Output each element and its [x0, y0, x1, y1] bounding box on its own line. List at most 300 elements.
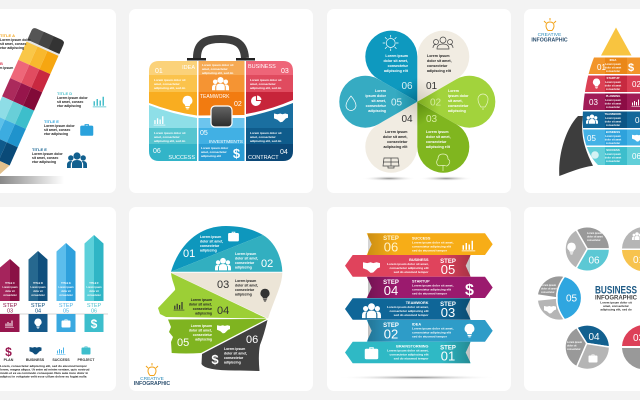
arrow step 03: TITLE C [5, 281, 15, 285]
head segment 03: Lorem ipsum [235, 279, 256, 283]
petal texts: consectetur [426, 140, 447, 144]
arrow step 06: dolor sit [89, 290, 99, 293]
head segment 04 [158, 273, 267, 318]
head segment 05: consectetur [193, 333, 213, 337]
arrow step 05: consectetur [59, 294, 73, 297]
segment: idea: amet, consectetur [154, 82, 181, 86]
segment: contract: adipiscing elit, sed do [250, 139, 282, 143]
head segment 04: 04 [217, 305, 229, 317]
ribbon step 01: sed do eiusmod tempor [394, 356, 429, 360]
segment: success: Lorem ipsum dolor sit [154, 131, 186, 135]
legend: success [52, 348, 70, 362]
circle 05: dolor sit amet [541, 288, 557, 290]
arrow step 06 [84, 235, 104, 332]
arrow step 04: STEP [31, 303, 46, 309]
center title: INFOGRAPHIC [595, 296, 638, 302]
petal numbers: 05 [391, 98, 403, 108]
ribbon step 05: STEP [440, 259, 456, 265]
arrow step 06: STEP [87, 303, 102, 309]
circle 04: dolor sit [567, 344, 577, 348]
panel: briefcase infographic [129, 9, 313, 193]
arrow step 03: 03 [7, 308, 13, 314]
ribbon step 06 [367, 233, 493, 255]
legend: business: BUSINESS [26, 358, 45, 362]
title D: sit amet, consec [57, 100, 83, 104]
circle 05: consectetur [541, 291, 555, 294]
arrow step 05: TITLE E [61, 281, 71, 285]
rocket tier 06 [586, 147, 640, 165]
segment: investments: $ [233, 146, 241, 161]
segment: investments: amet, consectetur [201, 150, 228, 154]
segment: teamwork: Lorem ipsum dolor sit [202, 63, 234, 67]
ribbon step 05: Lorem ipsum dolor sit amet, [387, 262, 429, 266]
rocket tier 05: consectetur [606, 142, 620, 145]
ribbon step 05: BUSINESS [409, 258, 429, 262]
rocket tier 03: Lorem ipsum [605, 99, 622, 102]
head segment 06 [202, 320, 268, 371]
ribbon step 04: 04 [384, 283, 398, 298]
arrow step 05: dolor sit [61, 290, 71, 293]
ribbon step 02: 02 [384, 326, 398, 342]
head segment 04: Lorem ipsum [191, 298, 212, 302]
circle 05: 05 [566, 294, 577, 304]
ribbon step 05 [345, 255, 471, 277]
circle 04: 04 [588, 332, 600, 343]
panel: rocket infographic [524, 9, 640, 193]
ribbon step 05: sed do eiusmod tempor [394, 270, 429, 274]
rocket tier 03: consectetur [606, 106, 620, 109]
rocket tier 05: dolor sit amet [605, 138, 621, 142]
legend: business [26, 347, 45, 362]
petal texts: Lorem ipsum [385, 130, 408, 134]
title F: Lorem ipsum dolor [32, 152, 63, 156]
ribbon step 06: STEP [383, 236, 399, 242]
icon: chart [93, 97, 106, 107]
panel: head infographic [129, 207, 313, 391]
icon: sun [383, 35, 398, 51]
segment: business: adipiscing elit, sed do [250, 86, 282, 90]
petal numbers: 03 [426, 114, 438, 125]
head segment 04: dolor sit amet, [189, 302, 212, 306]
ribbon step 06: sed do eiusmod tempor [412, 248, 448, 252]
circle 04 [565, 325, 610, 369]
title B: B [0, 61, 3, 66]
rocket tier 04: dolor sit amet [605, 120, 621, 124]
ribbon step 02: Lorem ipsum dolor sit amet, [412, 326, 454, 330]
rocket tier 06: consectetur [606, 160, 620, 163]
title D: etur adipiscing [57, 104, 81, 108]
arrow step 04: TITLE D [33, 281, 43, 285]
petal texts: dolor sit amet, [426, 135, 451, 139]
segment: investments: Lorem ipsum dolor [201, 146, 229, 150]
arrow step 05: 05 [63, 308, 69, 314]
petal texts: consectetur [366, 104, 387, 108]
ribbon step 06: Lorem ipsum dolor sit amet, [412, 240, 454, 244]
head segment 01: dolor sit amet, [200, 240, 223, 244]
ribbon step 04: STEP [383, 280, 399, 286]
icon: people [67, 152, 87, 168]
head segment 06: dolor sit amet, [224, 352, 247, 356]
segment: contract: amet, consectetur [250, 135, 277, 139]
legend: success: SUCCESS [52, 358, 70, 362]
petal 03 [395, 89, 479, 182]
rocket tier 03: 03 [589, 98, 598, 107]
panel: ribbon steps infographic [327, 207, 511, 391]
title D: Lorem ipsum dolor [57, 96, 88, 100]
title B [0, 61, 13, 70]
petal 05 [339, 76, 417, 128]
ribbon step 03: STEP [440, 302, 456, 308]
panel: circles infographic [524, 207, 640, 391]
petal texts: Lorem [448, 89, 459, 93]
petal texts: Lorem ipsum [385, 54, 408, 58]
petal texts: consectetur [448, 104, 469, 108]
logo: creative infographic: INFOGRAPHIC [134, 381, 170, 387]
legend: plan: PLAN [4, 358, 14, 362]
segment: teamwork: amet, consectetur [202, 67, 229, 71]
head segment 03: consectetur [235, 288, 255, 292]
head segment 06: adipiscing [224, 360, 241, 364]
ribbon step 04: consectetur adipiscing elit [412, 288, 451, 292]
petal texts: consectetur [427, 64, 448, 68]
logo: creative infographic [531, 18, 568, 44]
head segment 05: 05 [177, 337, 189, 349]
paragraph: Lorem, consectetur adipiscing elit, sed do eiusmod tempor [0, 364, 88, 368]
rocket tier 02: STARTUP [606, 76, 620, 80]
rocket tier 04: TEAMWORK [605, 112, 621, 116]
arrow step 03: STEP [3, 303, 18, 309]
head segment 04: adipiscing [195, 312, 212, 316]
paragraph: lorem, magna aliqua. Ut enim ad minim veniam, quis nostrud [0, 368, 90, 372]
ribbon step 03: Lorem ipsum dolor sit amet, [387, 305, 429, 309]
rocket tier 05: BUSINESS [606, 130, 620, 134]
petal texts: consectetur [388, 64, 409, 68]
center title: amet, consectetur [603, 304, 630, 308]
head segment 03: adipiscing [235, 292, 252, 296]
arrow step 06: 06 [91, 308, 97, 314]
head segment 02: 02 [261, 258, 273, 270]
arrow step 04: consectetur [31, 294, 45, 297]
ribbon step 01: BRAINSTORMING [396, 344, 429, 348]
circle 06: consectetur [587, 239, 601, 242]
ribbon step 01: Lorem ipsum dolor sit amet, [387, 348, 429, 352]
segment: teamwork: 02 [234, 101, 242, 108]
head segment 01 [171, 226, 263, 272]
legend: plan [4, 345, 14, 362]
ribbon step 01: STEP [440, 346, 456, 352]
petal texts: adipiscing [368, 109, 386, 113]
segment: business: 03 [281, 68, 289, 75]
head segment 06: Lorem ipsum [224, 347, 245, 351]
arrow step 06: Lorem ipsum [86, 286, 102, 289]
petal texts: consectetur [387, 140, 408, 144]
head segment 01: adipiscing [200, 248, 217, 252]
center title: Lorem ipsum dolor sit [600, 300, 632, 304]
circle 03 [622, 325, 640, 369]
rocket tier 01: dolor sit amet [605, 66, 621, 70]
circle 06 [565, 227, 610, 271]
ribbon step 02 [367, 320, 493, 342]
title F: TITLE E [32, 147, 47, 152]
petal numbers: 06 [402, 81, 413, 92]
rocket tier 02: dolor sit amet [605, 84, 621, 88]
arrow step 05: Lorem ipsum [58, 286, 74, 289]
segment: teamwork: adipiscing elit, sed do [202, 71, 234, 75]
petal texts: sit amet, [371, 99, 386, 103]
segment: idea: 01 [155, 68, 163, 75]
circle 06: dolor sit amet [587, 236, 603, 238]
segment: idea: IDEA [182, 65, 195, 71]
rocket tier 02 [580, 76, 640, 92]
rocket tier 05 [580, 130, 640, 146]
rocket tier 06: Lorem ipsum [605, 153, 622, 156]
arrow step 03 [0, 259, 20, 332]
rocket fin [559, 116, 593, 176]
segment: business [246, 61, 293, 114]
arrow step 06: $ [91, 317, 98, 331]
rocket tier 01: $ [628, 62, 634, 74]
circle 04: Lorem ipsum [567, 341, 582, 344]
panel: pencil infographic [0, 9, 116, 202]
icon: water drop [346, 96, 356, 110]
rocket nose [601, 28, 632, 56]
title A: sit amet, consec [0, 42, 26, 46]
shelf line [0, 313, 108, 315]
panel: flower infographic [327, 9, 511, 193]
arrow step 05: STEP [59, 303, 74, 309]
rocket tier 01: 01 [597, 63, 606, 72]
ribbon step 03 [345, 298, 471, 320]
rocket tier 01: Lorem ipsum [605, 63, 622, 66]
petal texts: Lorem ipsum [426, 130, 449, 134]
petal 02 [417, 76, 495, 128]
ribbon step 02: IDEA [412, 322, 421, 326]
segment: idea: Lorem ipsum dolor sit [154, 78, 186, 82]
petal texts: adipiscing elit [384, 145, 408, 149]
ribbon step 01 [345, 342, 471, 364]
segment: contract: Lorem ipsum dolor sit [250, 131, 282, 135]
icon: people outline [433, 37, 453, 49]
pencil [0, 27, 65, 202]
pencil shadow [0, 176, 64, 184]
center title: adipiscing elit, sed do [600, 308, 632, 312]
paragraph: adipisci in voluptate velit esse cillum dolore eu fugiat nulla [0, 374, 87, 378]
segment: investments: 05 [200, 130, 208, 137]
ribbon step 04: $ [465, 282, 474, 299]
segment: teamwork: TEAMWORK [200, 94, 230, 100]
title E: sit amet, consec [44, 128, 70, 132]
rocket tier 01: consectetur [606, 70, 620, 73]
ribbon step 04: Lorem ipsum dolor sit amet, [412, 284, 454, 288]
segment: success: SUCCESS [168, 155, 195, 161]
arrow step 03: Lorem ipsum [2, 286, 18, 289]
title E: Lorem ipsum dolor [44, 124, 75, 128]
logo: creative infographic: INFOGRAPHIC [531, 38, 568, 44]
segment: investments: INVESTMENTS [209, 139, 243, 145]
segment: business: amet, consectetur [250, 82, 277, 86]
petal numbers: 04 [402, 114, 413, 125]
rocket tier 02: consectetur [606, 88, 620, 91]
ribbon step 02: STEP [383, 323, 399, 329]
circle 05: Lorem ipsum [541, 284, 556, 287]
petal texts: adipiscing elit [426, 145, 451, 149]
petal texts: adipiscing elit [427, 69, 452, 73]
segment: idea: adipiscing elit, sed do [154, 86, 186, 90]
legend: project [78, 346, 95, 362]
title E [44, 119, 75, 136]
head segment 05: adipiscing [195, 338, 212, 342]
head segment 05: dolor sit amet, [189, 328, 212, 332]
ribbon step 03: 03 [441, 305, 455, 320]
petal texts [365, 54, 469, 149]
ribbon step 05: consectetur adipiscing elit [389, 266, 428, 270]
arrow step 03: consectetur [3, 294, 17, 297]
head segment 03: 03 [217, 279, 229, 291]
rocket tier 01 [588, 58, 640, 74]
segment: success: amet, consectetur [154, 135, 181, 139]
petal numbers: 01 [426, 81, 438, 92]
rocket tier 06: dolor sit amet [605, 156, 621, 160]
title F: sit amet, consec [32, 156, 58, 160]
legend: project: PROJECT [78, 358, 95, 362]
flower shadow [362, 176, 473, 181]
ribbon step 02: sed do eiusmod tempor [412, 334, 448, 338]
segment: business: BUSINESS [248, 64, 276, 70]
paragraph [0, 364, 90, 378]
ribbon step 03: TEAMWORK [406, 301, 429, 305]
head segment 03: dolor sit amet, [235, 284, 258, 288]
circle 06: Lorem ipsum [587, 232, 602, 235]
arrow step 04: dolor sit [33, 290, 43, 293]
petal texts: adipiscing elit [384, 69, 409, 73]
segment: investments: adipiscing elit [201, 154, 221, 158]
petal texts: ipsum dolor [365, 94, 387, 98]
briefcase clasp [211, 106, 232, 127]
arrow step 03: dolor sit [5, 290, 15, 293]
title D: TITLE D [57, 91, 72, 96]
ribbon step 04: sed do eiusmod tempor [412, 292, 448, 296]
rocket tier 06: SUCCESS [606, 148, 620, 152]
logo: creative infographic: CREATIVE [140, 376, 164, 382]
head segment 01: 01 [183, 248, 195, 260]
segment: success: 06 [153, 148, 161, 155]
petal 01 [395, 21, 479, 115]
petal 04 [356, 89, 440, 182]
ribbon step 01: 01 [441, 348, 455, 364]
petal numbers: 02 [430, 98, 442, 108]
rocket tier 04 [580, 112, 640, 128]
head segment 05: Lorem ipsum [191, 324, 212, 328]
circle 06: 06 [588, 256, 600, 266]
paragraph: modo et ex ea commodo consequat. Duis aute irure dolor in [0, 371, 88, 375]
circle 05 [537, 276, 582, 320]
rocket tier 03 [580, 94, 640, 110]
arrow step 04: 04 [35, 308, 41, 314]
head segment 01: consectetur [200, 244, 220, 248]
petal texts: adipiscing [448, 109, 466, 113]
rocket tier 04: consectetur [606, 124, 620, 127]
icon: bulb outline [478, 94, 488, 109]
ribbon step 04: STARTUP [412, 280, 430, 284]
ribbon step 03: sed do eiusmod tempor [394, 313, 429, 317]
icon: tree [437, 154, 450, 171]
rocket tier 05: 05 [587, 134, 596, 143]
title D [57, 91, 88, 108]
legend: plan: $ [5, 345, 12, 359]
head segment 02: adipiscing [235, 266, 252, 270]
ribbon step 02: consectetur adipiscing elit [412, 330, 451, 334]
rocket tier 05: Lorem ipsum [605, 135, 622, 138]
petal 06 [356, 21, 440, 115]
icon: solar panel [383, 158, 399, 168]
segment: investments [198, 118, 244, 161]
arrow step 06: consectetur [87, 294, 101, 297]
arrow step 06: TITLE F [89, 281, 99, 285]
icon: briefcase [80, 124, 93, 136]
petal texts: Lorem ipsum [427, 54, 450, 58]
head segment 06: 06 [246, 334, 258, 346]
segment: teamwork [198, 61, 244, 116]
arrow step 04: Lorem ipsum [30, 286, 46, 289]
segment: business: Lorem ipsum dolor sit [250, 78, 282, 82]
arrow step 05 [56, 243, 76, 332]
ribbon step 04 [367, 277, 493, 299]
segment: idea [149, 61, 197, 116]
segment: contract [246, 103, 293, 161]
head segment 01: Lorem ipsum [200, 235, 221, 239]
head segment 06: $ [211, 352, 219, 367]
title A: etur adipiscing [0, 46, 24, 50]
circle 01 [622, 227, 640, 271]
rocket tier 01: IDEA [610, 58, 616, 62]
ribbon step 01: consectetur adipiscing elit [389, 352, 428, 356]
rocket tier 02: Lorem ipsum [605, 81, 622, 84]
title A [0, 33, 31, 50]
title A: Lorem ipsum dolor [0, 38, 31, 42]
briefcase handle [187, 39, 255, 60]
segment: contract: 04 [280, 149, 288, 156]
segment: contract: CONTRACT [248, 155, 279, 161]
head segment 03 [171, 273, 282, 318]
petal texts: dolor sit amet, [427, 59, 452, 63]
center title [595, 284, 638, 312]
petal texts: sit amet, [448, 99, 463, 103]
head segment 06: consectetur [224, 356, 244, 360]
ribbon shadow [337, 375, 497, 380]
head segment 02: Lorem ipsum [235, 252, 256, 256]
petal texts: Lorem [375, 89, 386, 93]
title E: TITLE E [44, 119, 59, 124]
panel: step arrows bar chart [0, 207, 116, 391]
head segment 04: consectetur [193, 307, 213, 311]
rocket tier 03: PLANNING [606, 94, 620, 98]
ribbon step 06: SUCCESS [412, 236, 431, 240]
petal numbers [391, 81, 442, 125]
title F: etur adipiscing [32, 160, 56, 164]
ribbon step 03: consectetur adipiscing elit [389, 309, 428, 313]
circle 04: consectetur [567, 348, 581, 351]
head segment 02: consectetur [235, 261, 255, 265]
segment: success: adipiscing elit, sed do [154, 139, 186, 143]
rocket tier 03: dolor sit amet [605, 102, 621, 106]
title A: TITLE A [0, 33, 15, 38]
segment: success [149, 105, 197, 161]
ribbon step 06: consectetur adipiscing elit [412, 244, 451, 248]
logo: creative infographic: CREATIVE [538, 32, 561, 38]
rocket tier 04: Lorem ipsum [605, 117, 622, 120]
title E: etur adipiscing [44, 132, 68, 136]
petal texts: dolor sit amet, [383, 59, 408, 63]
